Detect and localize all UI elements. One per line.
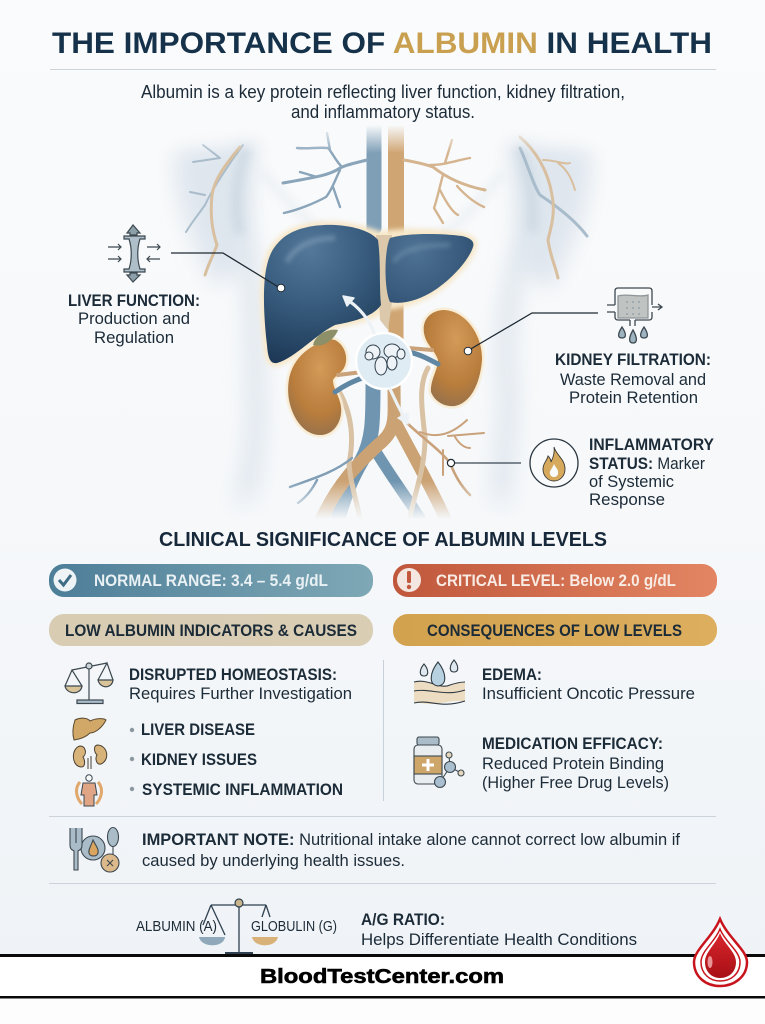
callout: inflammatory status: STATUS: Marker (589, 454, 705, 473)
list of causes: KIDNEY ISSUES (141, 750, 257, 769)
panel: consequences: MEDICATION EFFICACY: (482, 734, 663, 753)
subtitle: Albumin is a key protein reflecting liver function, kidney filtration, (141, 82, 625, 102)
kidney left (288, 340, 346, 435)
pill: normal range: NORMAL RANGE: 3.4 – 5.4 g/dL (94, 571, 328, 590)
list of causes: LIVER DISEASE (141, 720, 255, 739)
kidney right (424, 310, 482, 406)
liver (264, 225, 473, 363)
torso silhouette (175, 135, 591, 520)
footer band: BloodTestCenter.com (260, 966, 504, 988)
anatomy illustration (175, 128, 591, 520)
A/G ratio: ALBUMIN (A) (136, 919, 217, 935)
albumin circle (356, 333, 412, 389)
liver glow (264, 225, 473, 363)
pill: low albumin heading (49, 614, 373, 646)
icon: exclamation (397, 568, 421, 592)
pill: consequences heading: CONSEQUENCES OF LOW LEVELS (427, 621, 682, 640)
gallbladder (313, 330, 338, 346)
icon: liver disease (73, 718, 106, 740)
icon: A/G scale (199, 899, 278, 955)
A/G ratio: GLOBULIN (G) (251, 919, 337, 935)
icon: inflamed person (76, 775, 102, 806)
footer band (0, 954, 765, 998)
panel: causes (65, 663, 352, 806)
liver connective tissue (376, 235, 392, 330)
icon: check (54, 568, 76, 592)
panel: consequences: (Higher Free Drug Levels) (482, 773, 669, 792)
A/G ratio (136, 899, 637, 955)
callout: kidney filtration (464, 288, 711, 407)
icon: filter (607, 288, 662, 343)
callout: kidney filtration: Protein Retention (569, 388, 698, 407)
pill: consequences heading (393, 614, 717, 646)
subtitle: and inflammatory status. (291, 102, 475, 122)
pill: critical level: CRITICAL LEVEL: Below 2.0 g/dL (436, 571, 676, 590)
important note: IMPORTANT NOTE: Nutritional intake alone cannot correct low albumin if (142, 830, 680, 849)
important note (70, 828, 680, 872)
icon: flame (530, 439, 578, 487)
important note: caused by underlying health issues. (142, 851, 405, 870)
A/G ratio: Helps Differentiate Health Conditions (361, 930, 637, 949)
panel: consequences: EDEMA: (482, 665, 542, 684)
pill: normal range (49, 564, 373, 597)
lower vessels (338, 385, 373, 518)
callout: inflammatory status: of Systemic (589, 472, 674, 491)
callout: inflammatory status: Response (589, 490, 665, 509)
section heading: CLINICAL SIGNIFICANCE OF ALBUMIN LEVELS (159, 529, 607, 551)
albumin arrows (343, 296, 408, 424)
subtitle (141, 82, 625, 122)
panel: consequences: Reduced Protein Binding (482, 754, 664, 773)
title: THE IMPORTANCE OF ALBUMIN IN HEALTH (52, 27, 712, 60)
callout: liver function: Regulation (94, 328, 174, 347)
A/G ratio: A/G RATIO: (361, 910, 445, 929)
list of causes (130, 720, 343, 799)
icon: kidneys (73, 745, 107, 769)
pill: low albumin heading: LOW ALBUMIN INDICATORS & CAUSES (65, 621, 357, 640)
callout: liver function: LIVER FUNCTION: (68, 291, 200, 310)
panel: consequences (414, 660, 695, 792)
callout: liver function (68, 225, 285, 347)
panel: causes: Requires Further Investigation (129, 684, 352, 703)
list of causes: SYSTEMIC INFLAMMATION (142, 780, 343, 799)
callout: inflammatory status: INFLAMMATORY (589, 435, 715, 454)
icon: protein production (108, 225, 160, 282)
vessels (186, 128, 587, 518)
upper connective trunk below liver (388, 300, 404, 340)
callout: kidney filtration: Waste Removal and (560, 370, 706, 389)
icon: balance scale (65, 663, 113, 704)
icon: blood drop logo (694, 919, 747, 986)
callout: inflammatory status (447, 435, 715, 509)
panel: consequences: Insufficient Oncotic Pressure (482, 684, 695, 703)
renal vessels (335, 348, 438, 392)
pill: critical level (393, 564, 717, 597)
callout: liver function: Production and (78, 309, 190, 328)
icon: medication bottle (414, 737, 464, 788)
icon: plate and cutlery (70, 828, 119, 872)
panel: causes: DISRUPTED HOMEOSTASIS: (129, 665, 337, 684)
icon: edema (414, 660, 465, 704)
callout: kidney filtration: KIDNEY FILTRATION: (555, 350, 711, 369)
